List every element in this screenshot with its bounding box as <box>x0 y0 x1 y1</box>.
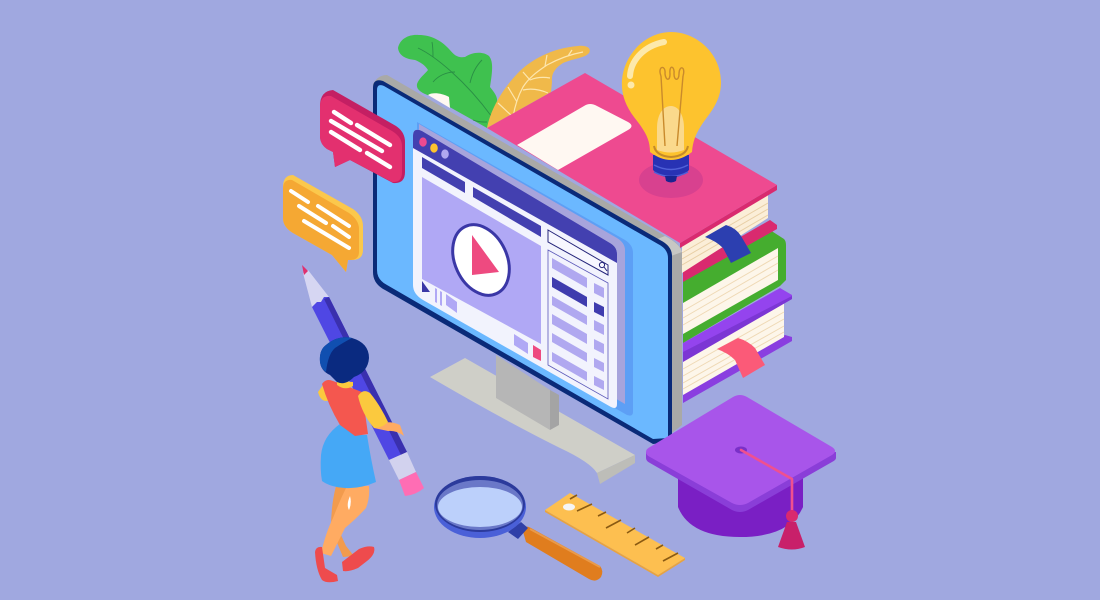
socket <box>508 522 528 539</box>
speech bubble: orange <box>283 175 363 272</box>
books stack <box>487 73 792 403</box>
video area <box>422 177 541 344</box>
monitor <box>373 75 682 444</box>
window title bar <box>413 130 617 263</box>
video player window <box>413 130 617 408</box>
pencil <box>302 265 424 496</box>
left sleeve <box>318 385 331 401</box>
play button <box>442 215 520 305</box>
arm <box>374 422 404 436</box>
icon: green leaf <box>398 35 497 128</box>
person: girl holding pencil <box>315 337 404 582</box>
monitor stand <box>430 355 635 484</box>
back leg <box>331 486 354 557</box>
icon: yellow leaf <box>487 46 590 128</box>
icon: light bulb <box>622 32 721 198</box>
tassel <box>778 522 805 550</box>
book: pink top <box>487 73 777 282</box>
book: green middle <box>683 230 786 343</box>
speech bubble: pink <box>320 90 405 183</box>
header bars <box>422 157 541 237</box>
handle <box>522 526 602 581</box>
bezel <box>373 75 682 436</box>
bookmark: blue <box>705 225 751 263</box>
lens <box>438 487 522 527</box>
screen frame <box>373 80 672 444</box>
search box <box>548 230 608 275</box>
shirt <box>322 380 368 436</box>
player controls <box>422 281 541 361</box>
skirt <box>321 424 376 488</box>
lens ring <box>434 476 526 538</box>
right sleeve <box>358 391 388 428</box>
cap board <box>646 452 836 512</box>
shoes <box>342 546 374 571</box>
collar <box>337 381 353 388</box>
tassel cord <box>735 446 747 454</box>
cap base <box>678 474 803 537</box>
front leg <box>321 486 369 556</box>
screen <box>377 85 668 439</box>
leg highlight <box>348 496 351 510</box>
stand neck <box>496 355 550 430</box>
book: purple bottom <box>683 288 792 403</box>
window backing <box>417 122 633 416</box>
playlist <box>548 250 608 399</box>
hair <box>320 337 369 383</box>
graduation cap <box>646 395 836 550</box>
stand base <box>430 358 635 473</box>
window buttons <box>419 137 449 159</box>
ruler <box>545 493 685 577</box>
magnifying glass <box>434 476 602 581</box>
bookmark: coral <box>717 338 765 378</box>
